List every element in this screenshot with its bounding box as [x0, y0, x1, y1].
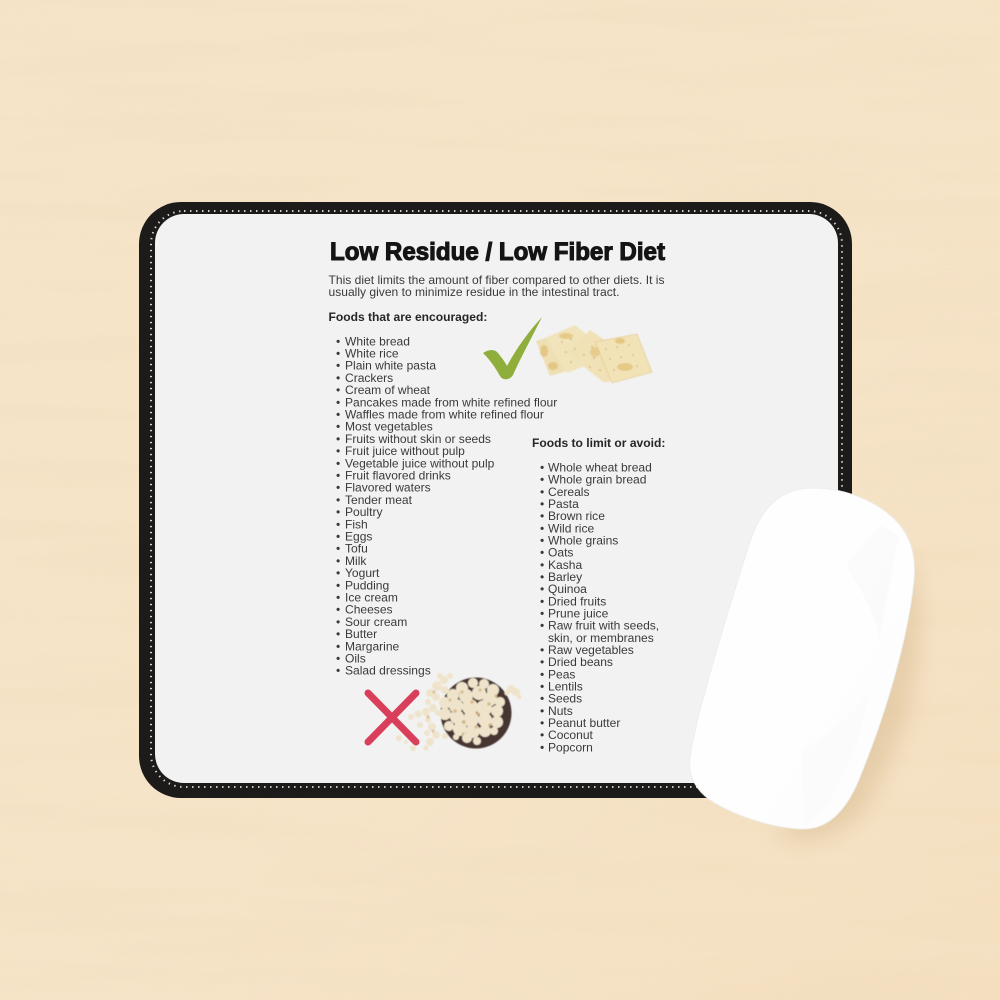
- list: encouraged foods: •: [336, 542, 340, 556]
- list: encouraged foods: •: [336, 652, 340, 666]
- list: encouraged foods: Eggs: [345, 530, 372, 544]
- list: encouraged foods: Fruits without skin or seeds: [345, 432, 491, 446]
- list: encouraged foods: •: [336, 517, 340, 531]
- list: foods to limit or avoid: Wild rice: [548, 521, 594, 535]
- list: encouraged foods: White bread: [345, 334, 410, 348]
- list: encouraged foods: •: [336, 371, 340, 385]
- list: foods to limit or avoid: Prune juice: [548, 606, 609, 620]
- list: encouraged foods: Ice cream: [345, 590, 398, 604]
- list: encouraged foods: •: [336, 346, 340, 360]
- list: foods to limit or avoid: •: [540, 728, 544, 742]
- list: encouraged foods: Tender meat: [345, 493, 413, 507]
- list: foods to limit or avoid: •: [540, 716, 544, 730]
- list: foods to limit or avoid: Pasta: [548, 497, 579, 511]
- list: foods to limit or avoid: •: [540, 546, 544, 560]
- list: foods to limit or avoid: •: [540, 521, 544, 535]
- list: encouraged foods: •: [336, 639, 340, 653]
- list: encouraged foods: Fish: [345, 517, 368, 531]
- list: foods to limit or avoid: Popcorn: [548, 740, 593, 754]
- list: encouraged foods: Flavored waters: [345, 481, 431, 495]
- list: foods to limit or avoid: Dried beans: [548, 655, 613, 669]
- list: encouraged foods: Most vegetables: [345, 420, 433, 434]
- list: foods to limit or avoid: Quinoa: [548, 582, 587, 596]
- image: bowl of popcorn: [396, 673, 522, 751]
- list: encouraged foods: [336, 334, 557, 678]
- list: foods to limit or avoid: Cereals: [548, 485, 590, 499]
- list: encouraged foods: •: [336, 481, 340, 495]
- list: encouraged foods: •: [336, 603, 340, 617]
- list: foods to limit or avoid: •: [540, 460, 544, 474]
- list: foods to limit or avoid: Barley: [548, 570, 582, 584]
- list: foods to limit or avoid: •: [540, 619, 544, 633]
- icon: green check mark: [483, 317, 542, 379]
- list: foods to limit or avoid: Kasha: [548, 558, 582, 572]
- icon: red cross: [368, 693, 416, 742]
- list: encouraged foods: Cheeses: [345, 603, 393, 617]
- list: encouraged foods: Waffles made from white refined flour: [345, 408, 544, 422]
- list: encouraged foods: •: [336, 664, 340, 678]
- list: encouraged foods: •: [336, 590, 340, 604]
- list: foods to limit or avoid: Raw fruit with seeds,: [548, 619, 659, 633]
- list: foods to limit or avoid: Oats: [548, 546, 573, 560]
- list: encouraged foods: •: [336, 359, 340, 373]
- list: encouraged foods: Milk: [345, 554, 367, 568]
- list: foods to limit or avoid: Seeds: [548, 692, 582, 706]
- list: encouraged foods: •: [336, 615, 340, 629]
- list: encouraged foods: Pancakes made from white refined flour: [345, 395, 557, 409]
- list: encouraged foods: Sour cream: [345, 615, 407, 629]
- list: encouraged foods: Salad dressings: [345, 664, 431, 678]
- list: encouraged foods: •: [336, 468, 340, 482]
- list: encouraged foods: •: [336, 444, 340, 458]
- mouse shadow: [770, 550, 920, 841]
- list: foods to limit or avoid: •: [540, 594, 544, 608]
- list: foods to limit or avoid: •: [540, 704, 544, 718]
- list: foods to limit or avoid: Dried fruits: [548, 594, 606, 608]
- list: foods to limit or avoid: •: [540, 680, 544, 694]
- list: encouraged foods: •: [336, 554, 340, 568]
- heading: foods encouraged: Foods that are encouraged:: [328, 310, 487, 324]
- list: encouraged foods: •: [336, 334, 340, 348]
- list: encouraged foods: •: [336, 578, 340, 592]
- list: foods to limit or avoid: •: [540, 485, 544, 499]
- list: foods to limit or avoid: •: [540, 473, 544, 487]
- list: foods to limit or avoid: Peas: [548, 667, 575, 681]
- list: foods to limit or avoid: Lentils: [548, 680, 583, 694]
- list: foods to limit or avoid: Whole grain bread: [548, 473, 646, 487]
- mouse pad: [139, 202, 852, 798]
- list: foods to limit or avoid: Coconut: [548, 728, 594, 742]
- list: foods to limit or avoid: •: [540, 643, 544, 657]
- list: encouraged foods: Vegetable juice without pulp: [345, 456, 495, 470]
- list: encouraged foods: •: [336, 383, 340, 397]
- list: encouraged foods: •: [336, 530, 340, 544]
- list: encouraged foods: •: [336, 627, 340, 641]
- heading: foods to limit: Foods to limit or avoid:: [532, 436, 665, 450]
- list: foods to limit or avoid: Whole grains: [548, 534, 618, 548]
- list: foods to limit or avoid: Whole wheat bread: [548, 460, 652, 474]
- list: encouraged foods: •: [336, 432, 340, 446]
- list: foods to limit or avoid: [540, 460, 659, 754]
- title: Low Residue / Low Fiber Diet: [330, 238, 666, 266]
- list: foods to limit or avoid: Peanut butter: [548, 716, 620, 730]
- intro text: This diet limits the amount of fiber compared to other diets. It is: [328, 273, 664, 287]
- intro text: [328, 273, 664, 299]
- list: foods to limit or avoid: •: [540, 558, 544, 572]
- list: foods to limit or avoid: •: [540, 509, 544, 523]
- list: foods to limit or avoid: Raw vegetables: [548, 643, 634, 657]
- list: encouraged foods: •: [336, 493, 340, 507]
- intro text: usually given to minimize residue in the intestinal tract.: [328, 285, 620, 299]
- list: foods to limit or avoid: •: [540, 655, 544, 669]
- list: foods to limit or avoid: •: [540, 497, 544, 511]
- list: foods to limit or avoid: •: [540, 740, 544, 754]
- list: encouraged foods: Crackers: [345, 371, 393, 385]
- list: encouraged foods: Pudding: [345, 578, 389, 592]
- list: encouraged foods: Fruit juice without pulp: [345, 444, 465, 458]
- list: encouraged foods: Margarine: [345, 639, 400, 653]
- list: foods to limit or avoid: •: [540, 692, 544, 706]
- list: encouraged foods: •: [336, 456, 340, 470]
- image: saltine crackers: [536, 325, 652, 383]
- list: foods to limit or avoid: skin, or membranes: [548, 631, 654, 645]
- list: foods to limit or avoid: Nuts: [548, 704, 573, 718]
- wireless mouse: [690, 488, 914, 829]
- list: foods to limit or avoid: •: [540, 667, 544, 681]
- list: foods to limit or avoid: •: [540, 606, 544, 620]
- list: encouraged foods: •: [336, 420, 340, 434]
- list: foods to limit or avoid: Brown rice: [548, 509, 605, 523]
- list: encouraged foods: •: [336, 566, 340, 580]
- list: foods to limit or avoid: •: [540, 534, 544, 548]
- list: encouraged foods: •: [336, 395, 340, 409]
- list: encouraged foods: Oils: [345, 652, 366, 666]
- list: encouraged foods: Butter: [345, 627, 377, 641]
- list: encouraged foods: •: [336, 408, 340, 422]
- list: encouraged foods: Poultry: [345, 505, 382, 519]
- list: encouraged foods: Yogurt: [345, 566, 380, 580]
- list: foods to limit or avoid: •: [540, 570, 544, 584]
- list: encouraged foods: Fruit flavored drinks: [345, 468, 451, 482]
- list: encouraged foods: Tofu: [345, 542, 368, 556]
- list: encouraged foods: White rice: [345, 346, 399, 360]
- list: encouraged foods: Cream of wheat: [345, 383, 431, 397]
- list: foods to limit or avoid: •: [540, 582, 544, 596]
- list: encouraged foods: Plain white pasta: [345, 359, 436, 373]
- list: encouraged foods: •: [336, 505, 340, 519]
